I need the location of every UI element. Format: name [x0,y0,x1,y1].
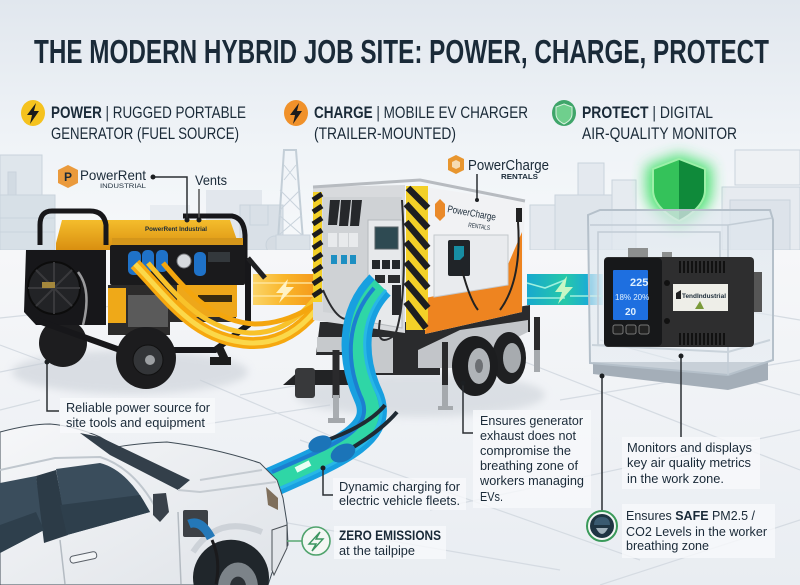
monitor device [604,248,762,347]
callout: dynamic charging [333,478,466,510]
label: vents: Vents [195,172,227,188]
callout: dynamic charging: electric vehicle fleets. [339,493,460,508]
callout: monitors and displays: Monitors and displays [627,440,752,455]
safe levels text [622,504,775,558]
charger brand on panel: RENTALS [468,222,491,232]
header: protect [552,100,737,143]
monitor screen: 20 [625,307,637,318]
shield icon [646,154,712,228]
truck window frame [0,457,158,512]
hazard strip left [313,192,322,302]
header: protect: AIR-QUALITY MONITOR [582,125,737,143]
callout: dynamic charging: Dynamic charging for [339,479,461,494]
icon: power bolt [21,100,45,126]
charge heading text: CHARGE | MOBILE EV CHARGER [314,104,528,122]
monitor vents [680,261,724,345]
charger brand on panel: PowerCharge [446,204,497,224]
charger open cabinet [313,185,405,333]
background sky [0,0,800,305]
brand: PowerRent logo: INDUSTRIAL [100,183,146,190]
brand: PowerRent logo: P [64,170,72,184]
safe levels text: breathing zone [626,538,709,553]
callout: zero emissions: ZERO EMISSIONS [339,528,441,543]
truck door seams [60,512,181,584]
callout: monitors and displays: in the work zone. [627,471,724,486]
monitor brand label: TendIndustrial [682,293,726,300]
air-quality monitor enclosure [588,210,773,390]
callout: exhaust breathing zone: Ensures generator [480,413,584,428]
icon: bolt on teal band [555,276,573,304]
trailer jack stands [445,317,537,388]
header: power: GENERATOR (FUEL SOURCE) [51,125,239,143]
callout: reliable power source [60,398,215,433]
callout: reliable power source: site tools and equipment [66,415,205,430]
safe levels text: Ensures SAFE PM2.5 / [626,508,755,523]
truck windows [0,463,150,553]
generator recoil housing [24,250,106,325]
callout: zero emissions [302,526,446,559]
leader lines [47,174,681,541]
monitor brand label [673,284,728,311]
callout: exhaust breathing zone [473,410,591,508]
monitor buttons [613,325,649,334]
truck wheel [193,526,269,585]
generator engine block [108,285,236,335]
monitor screen [613,270,649,320]
generator front wheel [116,327,176,389]
yellow power cables [135,263,352,343]
callout: monitors and displays: key air quality metrics [627,455,751,470]
brand: PowerRent logo [58,165,146,190]
header: charge: (TRAILER-MOUNTED) [314,125,456,143]
brand: PowerCharge logo [448,155,549,181]
icon: charge bolt [284,100,308,126]
charger control tower [368,220,402,328]
truck roof and body [0,424,288,585]
leader line dots [44,174,684,470]
truck mirror [153,493,169,522]
generator: PowerRent Industrial [145,227,207,233]
icon: bolt on yellow band [276,279,294,303]
callout: exhaust breathing zone: breathing zone of [480,458,578,473]
generator fuel tank [56,220,238,250]
generator [12,211,265,394]
safe levels text: CO2 Levels in the worker [626,524,768,539]
icon: worker helmet [587,511,617,541]
monitor screen: 225 [630,277,648,289]
callout: safe levels [587,504,775,558]
mobile EV charger trailer [283,180,545,423]
callout: exhaust breathing zone: workers managing [479,473,584,488]
electric truck [0,424,288,585]
generator rear wheel [39,319,87,367]
trailer frame [316,305,530,375]
callout: monitors and displays [622,437,760,489]
cable connectors [306,405,397,466]
header: charge [284,100,528,143]
truck front bumper [272,525,287,575]
brand: PowerCharge logo: RENTALS [501,174,538,181]
generator frame [36,258,248,350]
header: power [21,100,246,143]
zero emissions text [334,526,446,559]
floor with grid [0,250,800,585]
monitor screen: 18% 20% [615,293,649,302]
enclosure glass [588,210,773,375]
callout: exhaust breathing zone: exhaust does not [480,428,576,443]
protect heading text: PROTECT | DIGITAL [582,104,713,122]
power heading text: POWER | RUGGED PORTABLE [51,104,246,122]
charger body side panel [425,187,525,334]
trailer hitch [283,350,350,423]
trailer wheels [452,332,526,396]
energy band: charger to monitor [527,274,603,305]
teal charging cable ribbon [272,285,397,490]
charger roof edge [313,180,525,201]
icon: zero emissions bolt [302,527,330,555]
truck door handle [69,551,97,564]
callout: exhaust breathing zone: EVs. [480,489,503,504]
charger brand on panel [435,199,497,232]
callout: exhaust breathing zone: compromise the [480,443,571,458]
truck charge port [183,510,218,584]
icon: protect shield [552,100,576,126]
brand: PowerCharge logo: PowerCharge [468,158,549,174]
callout: reliable power source: Reliable power source for [66,400,211,415]
brand: PowerRent logo: PowerRent [80,167,146,183]
callout: zero emissions: at the tailpipe [339,543,415,558]
truck hood crease [178,470,276,492]
energy band: generator to charger [253,274,315,305]
enclosure base [593,362,768,390]
background skyline [0,150,800,254]
truck windshield edge [80,433,190,490]
truck headlight [266,487,278,510]
hazard strip door [406,186,428,330]
generator control panel [110,245,245,285]
generator roll cage [40,211,245,262]
